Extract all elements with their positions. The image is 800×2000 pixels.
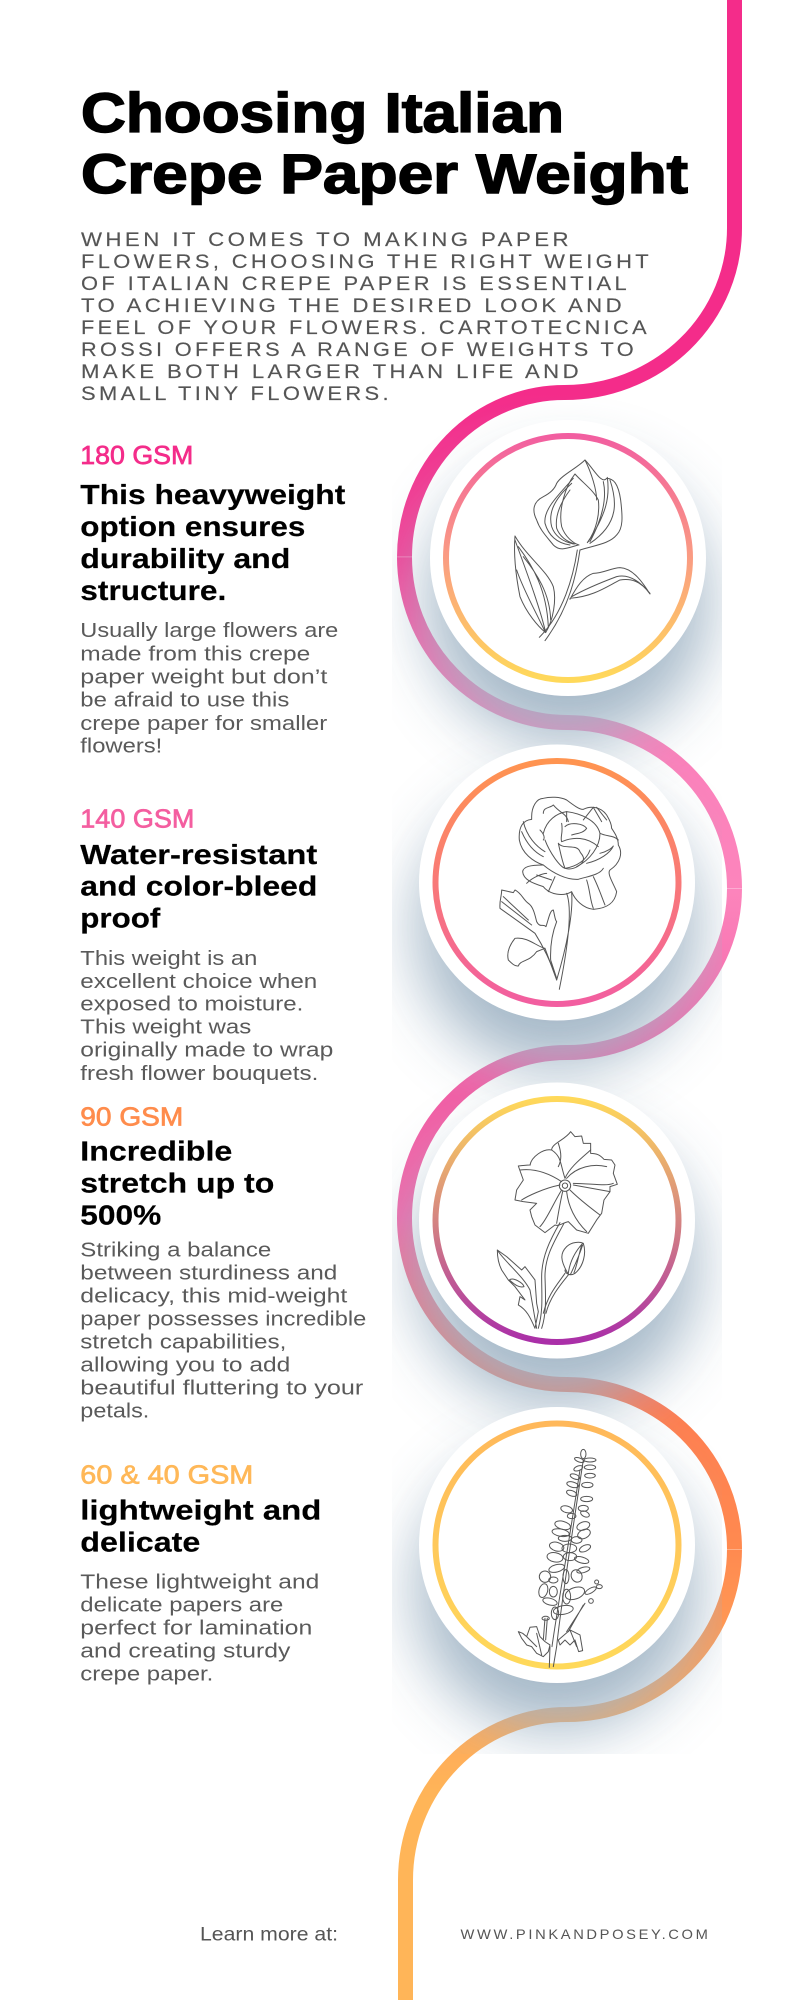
heading: water-resistant bbox=[80, 839, 317, 934]
icon: poppy line drawing bbox=[497, 1132, 617, 1328]
heading: incredible stretch: Incredible bbox=[80, 1136, 232, 1166]
heading: heavyweight: option ensures bbox=[80, 511, 305, 542]
intro paragraph: ROSSI OFFERS A RANGE OF WEIGHTS TO bbox=[81, 339, 637, 361]
shadow: circle 1 bbox=[427, 462, 709, 744]
body: water-resistant description: exposed to moisture. bbox=[80, 994, 303, 1016]
icon: peony line drawing bbox=[500, 797, 621, 989]
footer: website: WWW.PINKANDPOSEY.COM bbox=[460, 1926, 710, 1942]
body: stretch description: stretch capabilities, bbox=[80, 1332, 286, 1354]
circle badge: delphinium bbox=[419, 1407, 695, 1683]
intro paragraph bbox=[81, 229, 652, 405]
body: lightweight description: delicate papers are bbox=[80, 1594, 283, 1616]
body: water-resistant description: excellent choice when bbox=[80, 971, 317, 993]
circle badge: peony bbox=[419, 744, 695, 1020]
label: 180 GSM: 180 GSM bbox=[80, 440, 193, 470]
title: Crepe Paper Weight bbox=[81, 142, 688, 205]
heading: lightweight: delicate bbox=[80, 1526, 200, 1558]
body: heavyweight description bbox=[80, 620, 338, 758]
title: Choosing Italian bbox=[81, 81, 564, 144]
intro paragraph: FEEL OF YOUR FLOWERS. CARTOTECNICA bbox=[81, 317, 650, 339]
intro paragraph: TO ACHIEVING THE DESIRED LOOK AND bbox=[81, 295, 625, 317]
heading: water-resistant: and color-bleed bbox=[80, 870, 317, 902]
footer: learn more: Learn more at: bbox=[200, 1924, 338, 1946]
circle badge: poppy bbox=[419, 1082, 695, 1358]
intro paragraph: SMALL TINY FLOWERS. bbox=[81, 383, 392, 405]
label: 90 GSM: 90 GSM bbox=[80, 1102, 183, 1132]
heading: incredible stretch: stretch up to bbox=[80, 1168, 274, 1198]
body: lightweight description: perfect for lamination bbox=[80, 1618, 312, 1640]
heading: water-resistant: Water-resistant bbox=[80, 839, 317, 870]
heading: lightweight bbox=[80, 1494, 321, 1558]
shadow: circle 2 bbox=[416, 787, 698, 1069]
body: stretch description: paper possesses incredible bbox=[80, 1308, 366, 1330]
heading: heavyweight: structure. bbox=[80, 575, 226, 606]
body: water-resistant description: This weight is an bbox=[80, 948, 257, 970]
body: stretch description: Striking a balance bbox=[80, 1240, 271, 1262]
body: stretch description: beautiful fluttering to your bbox=[80, 1378, 364, 1400]
heading: lightweight: lightweight and bbox=[80, 1494, 321, 1526]
body: water-resistant description: originally made to wrap bbox=[80, 1040, 333, 1062]
heading: heavyweight bbox=[80, 479, 345, 606]
panel: 140 GSM text bbox=[80, 804, 333, 1085]
heading: heavyweight: durability and bbox=[80, 543, 290, 574]
icon: tulip line drawing bbox=[515, 460, 650, 641]
heading: heavyweight: This heavyweight bbox=[80, 479, 345, 510]
heading: incredible stretch: 500% bbox=[80, 1200, 161, 1230]
intro paragraph: WHEN IT COMES TO MAKING PAPER bbox=[81, 229, 572, 251]
title bbox=[81, 81, 688, 205]
body: heavyweight description: flowers! bbox=[80, 736, 162, 758]
label: 140 GSM: 140 GSM bbox=[80, 804, 194, 834]
body: lightweight description: These lightweight and bbox=[80, 1572, 319, 1594]
body: water-resistant description: This weight was bbox=[80, 1016, 251, 1038]
icon: delphinium line drawing bbox=[518, 1449, 602, 1667]
body: stretch description: delicacy, this mid-weight bbox=[80, 1286, 348, 1308]
body: lightweight description bbox=[80, 1572, 319, 1686]
shadow: circle 3 bbox=[416, 1125, 698, 1407]
body: stretch description: petals. bbox=[80, 1400, 149, 1422]
intro paragraph: MAKE BOTH LARGER THAN LIFE AND bbox=[81, 361, 582, 383]
body: heavyweight description: Usually large flowers are bbox=[80, 620, 338, 642]
winding gradient ribbon path bbox=[397, 0, 742, 2000]
panel: 60 and 40 GSM text bbox=[80, 1460, 321, 1686]
body: stretch description: allowing you to add bbox=[80, 1354, 290, 1376]
heading: incredible stretch bbox=[80, 1136, 274, 1230]
intro paragraph: OF ITALIAN CREPE PAPER IS ESSENTIAL bbox=[81, 273, 630, 295]
intro paragraph: FLOWERS, CHOOSING THE RIGHT WEIGHT bbox=[81, 251, 652, 273]
body: stretch description: between sturdiness and bbox=[80, 1262, 337, 1284]
shadow: circle 4 bbox=[416, 1449, 698, 1731]
label: 60 & 40 GSM: 60 & 40 GSM bbox=[80, 1460, 253, 1490]
heading: water-resistant: proof bbox=[80, 902, 161, 934]
body: heavyweight description: crepe paper for smaller bbox=[80, 713, 328, 735]
body: heavyweight description: made from this crepe bbox=[80, 644, 310, 666]
circle badge: tulip bbox=[430, 420, 706, 696]
panel: 180 GSM text bbox=[80, 440, 345, 758]
panel: 90 GSM text bbox=[80, 1102, 366, 1422]
body: water-resistant description bbox=[80, 948, 333, 1085]
body: stretch description bbox=[80, 1240, 366, 1422]
body: heavyweight description: be afraid to use this bbox=[80, 690, 289, 712]
body: lightweight description: and creating sturdy bbox=[80, 1640, 290, 1662]
body: water-resistant description: fresh flower bouquets. bbox=[80, 1063, 318, 1085]
body: lightweight description: crepe paper. bbox=[80, 1664, 213, 1686]
body: heavyweight description: paper weight but don’t bbox=[80, 666, 328, 688]
